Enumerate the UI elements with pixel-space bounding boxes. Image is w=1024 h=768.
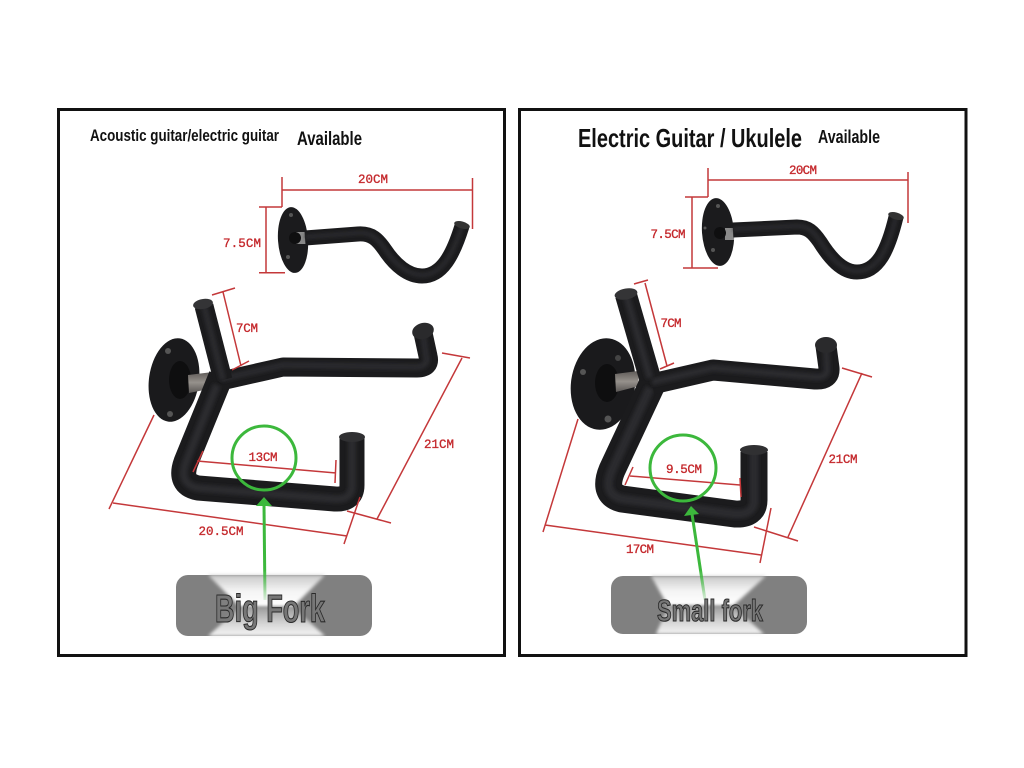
label: available: Available (818, 127, 880, 147)
green highlight circle (650, 435, 716, 501)
label: small fork: Small fork (657, 593, 764, 628)
small fork hook, right panel (565, 287, 837, 514)
small hook, left panel (276, 206, 471, 276)
badge: big fork (176, 497, 372, 636)
dimension: 20CM width: 20CM (358, 173, 388, 187)
heading: acoustic guitar/electric guitar: Acoustic guitar/electric guitar (90, 126, 279, 145)
badge: small fork (611, 506, 807, 634)
dimension: 7.5CM height (650, 197, 718, 268)
green highlight circle (232, 426, 296, 490)
dimension: 13CM fork opening (193, 451, 336, 483)
dimension: 7.5CM height: 7.5CM (223, 237, 261, 251)
dimension: 21CM depth: 21CM (424, 438, 454, 452)
dimension: 17CM length: 17CM (626, 543, 654, 557)
dimension: 7.5CM height: 7.5CM (650, 228, 686, 242)
dimension: 9.5CM fork opening: 9.5CM (666, 463, 702, 477)
label: available: Available (297, 129, 362, 150)
big fork hook, left panel (143, 297, 436, 499)
dimension: 20.5CM length (109, 415, 360, 544)
dimension: 9.5CM fork opening (625, 463, 741, 497)
label: big fork: Big Fork (215, 588, 325, 631)
dimension: 7CM post: 7CM (660, 317, 682, 331)
arrow: green pointer to fork (684, 506, 705, 600)
dimension: 20CM width (282, 173, 472, 229)
panel: acoustic / electric guitar big fork (58, 110, 504, 656)
panel: electric guitar / ukulele small fork (520, 110, 966, 656)
arrow: green pointer to fork (256, 497, 272, 600)
dimension: 7CM post (634, 280, 682, 369)
dimension: 20CM width: 20CM (789, 164, 817, 178)
dimension: 7.5CM height (223, 207, 285, 273)
dimension: 7CM post: 7CM (236, 322, 258, 336)
dimension: 21CM depth (347, 353, 470, 523)
small hook, right panel (700, 197, 905, 272)
dimension: 7CM post (212, 288, 258, 370)
heading: electric guitar / ukulele: Electric Guitar / Ukulele (578, 123, 802, 153)
dimension: 21CM depth (754, 368, 872, 541)
dimension: 21CM depth: 21CM (828, 453, 858, 467)
dimension: 13CM fork opening: 13CM (248, 451, 278, 465)
dimension: 20.5CM length: 20.5CM (198, 525, 244, 539)
dimension: 17CM length (543, 419, 771, 563)
dimension: 20CM width (708, 164, 908, 223)
